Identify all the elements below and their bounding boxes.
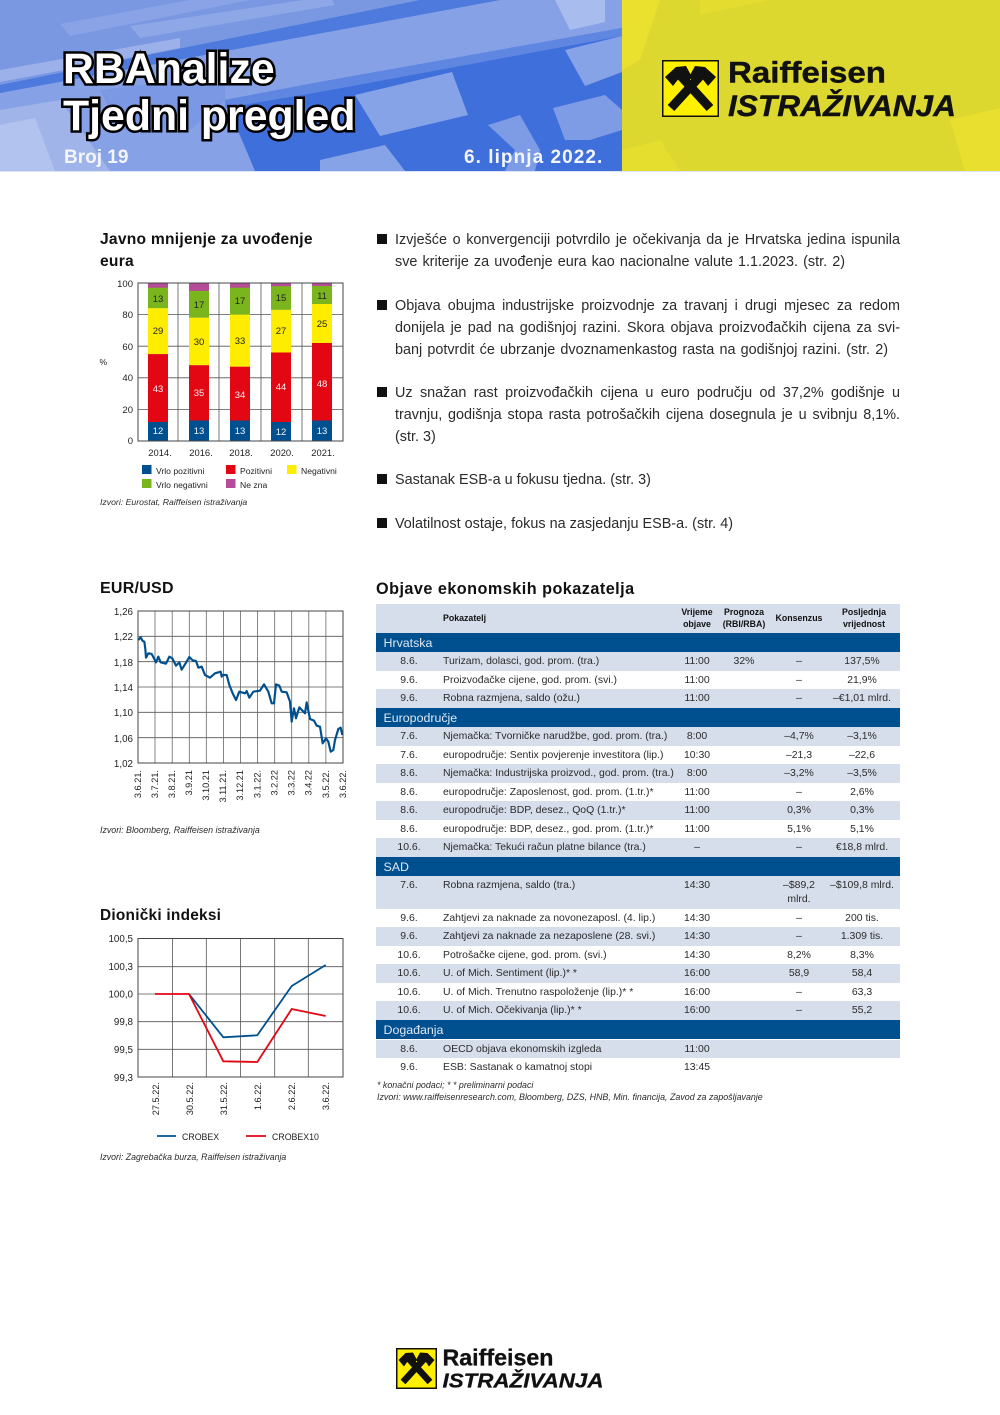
issue number: Broj 19 bbox=[64, 147, 128, 168]
row group: Europodručje: – bbox=[694, 842, 700, 853]
stacked bar chart: public opinion: 40 bbox=[122, 373, 133, 384]
row group: SAD: 14:30 bbox=[684, 880, 710, 891]
row group: SAD: – bbox=[796, 912, 802, 924]
row group: SAD: Zahtjevi za naknade za nezaposlene (28. svi.) bbox=[443, 931, 655, 942]
logo: Raiffeisen Istraživanja: Raiffeisen bbox=[728, 56, 886, 90]
row group: Europodručje: Njemačka: Tvorničke narudžbe, god. prom. (tra.) bbox=[443, 731, 667, 742]
stacked bar chart: public opinion: 13 bbox=[235, 426, 245, 437]
bullet 3: (str. 3) bbox=[395, 429, 436, 445]
stacked bar chart: public opinion: 13 bbox=[153, 294, 163, 305]
bullet 1: Izvješće o konvergenciji potvrdilo je očekivanja da je Hrvatska jedina ispunila bbox=[395, 232, 900, 248]
table header: Konsenzus bbox=[776, 613, 822, 623]
line chart: stock indices: CROBEX bbox=[182, 1132, 219, 1142]
line chart: EUR/USD: 1,18 bbox=[114, 658, 134, 669]
logo: Raiffeisen Istraživanja: ISTRAŽIVANJA bbox=[728, 89, 956, 123]
row group: SAD: 16:00 bbox=[684, 986, 710, 998]
stacked bar chart: public opinion: 0 bbox=[128, 436, 133, 447]
section: Hrvatska bbox=[376, 633, 900, 652]
line chart: stock indices: 99,3 bbox=[114, 1073, 134, 1084]
stacked bar chart: public opinion: 12 bbox=[153, 426, 163, 437]
table header: Vrijeme bbox=[681, 607, 713, 617]
table footnote and sources: Izvori: www.raiffeisenresearch.com, Bloomberg, DZS, HNB, Min. financija, Zavod za zapošljavanje bbox=[377, 1092, 763, 1102]
table header: Posljednja bbox=[842, 607, 886, 617]
row group: Hrvatska: 137,5% bbox=[844, 656, 880, 667]
row group: Događanja: 9.6. bbox=[400, 1062, 418, 1073]
section: SAD bbox=[376, 856, 900, 876]
row group: Europodručje: 11:00 bbox=[684, 786, 710, 798]
stacked bar chart: public opinion: 27 bbox=[276, 326, 286, 337]
row group: Hrvatska: 21,9% bbox=[847, 674, 877, 686]
row group: SAD: mlrd. bbox=[787, 894, 811, 905]
stacked bar chart: public opinion: Pozitivni bbox=[240, 466, 272, 476]
row group: Europodručje: –3,2% bbox=[784, 768, 814, 779]
table: economic indicator releases bbox=[376, 604, 900, 1073]
stacked bar chart: public opinion: Ne zna bbox=[240, 480, 267, 490]
line chart: EUR/USD: 1,02 bbox=[114, 759, 133, 770]
row group: SAD: Potrošačke cijene, god. prom. (svi.) bbox=[443, 950, 607, 960]
row group: SAD bbox=[376, 876, 900, 1020]
stacked bar chart: public opinion: 11 bbox=[317, 291, 327, 302]
row group: Europodručje: 8.6. bbox=[400, 824, 418, 834]
stacked bar chart: public opinion: 25 bbox=[317, 319, 327, 330]
line chart: stock indices: 27.5.22. bbox=[151, 1082, 161, 1115]
row group: Europodručje: Njemačka: Industrijska proizvod., god. prom. (tra.) bbox=[443, 768, 674, 779]
row group: Europodručje: europodručje: BDP, desez., QoQ (1.tr.)* bbox=[443, 805, 626, 816]
bullet 3 bbox=[377, 385, 900, 445]
row group: Hrvatska: 9.6. bbox=[400, 674, 418, 686]
source note: stock indices: Izvori: Zagrebačka burza, Raiffeisen istraživanja bbox=[100, 1152, 286, 1162]
line chart: EUR/USD: 3.7.21. bbox=[150, 770, 160, 798]
stacked bar chart: public opinion: 60 bbox=[122, 342, 133, 353]
row group: Događanja: 8.6. bbox=[400, 1044, 418, 1054]
stacked bar chart: public opinion: 2014. bbox=[148, 447, 172, 458]
stacked bar chart: public opinion: 43 bbox=[153, 384, 163, 395]
table header: (RBI/RBA) bbox=[723, 619, 765, 629]
stacked bar chart: public opinion: 12 bbox=[276, 427, 286, 438]
stacked bar chart: public opinion: 2021. bbox=[311, 447, 335, 458]
row group: Hrvatska: 9.6. bbox=[400, 693, 418, 704]
row group: SAD: 14:30 bbox=[684, 912, 710, 924]
row group: Europodručje: 10:30 bbox=[684, 750, 710, 760]
row group: Europodručje: 7.6. bbox=[400, 750, 418, 760]
row group: Hrvatska: – bbox=[796, 674, 802, 686]
row group: SAD: 10.6. bbox=[397, 950, 421, 960]
row group: Europodručje: 5,1% bbox=[787, 824, 811, 834]
section: SAD: SAD bbox=[384, 860, 409, 874]
line chart: EUR/USD bbox=[114, 607, 348, 803]
stacked bar chart: public opinion: 13 bbox=[317, 426, 327, 437]
issue date: 6. lipnja 2022. bbox=[464, 147, 603, 168]
line chart: EUR/USD: 3.2.22 bbox=[270, 770, 280, 796]
row group: Europodručje: 10.6. bbox=[397, 842, 421, 853]
row group: SAD: U. of Mich. Sentiment (lip.)* * bbox=[443, 968, 577, 979]
row group: Događanja: 11:00 bbox=[684, 1044, 710, 1054]
row group: Hrvatska: – bbox=[796, 693, 802, 704]
header banner bbox=[0, 0, 1000, 172]
header background: blue and yellow photo panels bbox=[0, 0, 1000, 172]
row group: Europodručje: europodručje: Zaposlenost, god. prom. (1.tr.)* bbox=[443, 786, 654, 798]
row group: Europodručje: 0,3% bbox=[850, 805, 874, 816]
bullet list: key messages bbox=[377, 232, 900, 532]
row group: SAD: –$109,8 mlrd. bbox=[830, 880, 894, 891]
line chart: EUR/USD: 3.6.22. bbox=[338, 770, 348, 798]
stacked bar chart: public opinion: 29 bbox=[153, 326, 163, 337]
row group: Europodručje: 8:00 bbox=[687, 731, 707, 742]
stacked bar chart: public opinion: 48 bbox=[317, 379, 327, 390]
row group: SAD: 58,4 bbox=[852, 968, 872, 979]
row group: SAD: 7.6. bbox=[400, 880, 418, 891]
row group: Europodručje: 8:00 bbox=[687, 768, 707, 779]
line chart: stock indices: 100,0 bbox=[108, 990, 134, 1000]
line chart: stock indices: 100,3 bbox=[108, 962, 134, 973]
bullet 3: travnju, godišnja stopa rasta potrošačkih cijena dosegnula je u svibnju 8,1%. bbox=[395, 407, 900, 423]
section: Europodručje bbox=[376, 708, 900, 727]
line chart: EUR/USD: 1,10 bbox=[114, 708, 134, 719]
row group: Hrvatska bbox=[376, 652, 900, 708]
line chart: EUR/USD: 3.4.22 bbox=[304, 770, 314, 796]
bullet 1: sve kriterije za uvođenje eura kao nacionalne valute 1.1.2023. (str. 2) bbox=[395, 254, 845, 270]
line chart: stock indices: 99,5 bbox=[114, 1045, 134, 1056]
row group: Europodručje: –21,3 bbox=[786, 750, 812, 760]
table header: objave bbox=[683, 619, 711, 629]
section: Događanja bbox=[376, 1020, 900, 1039]
table header: Prognoza bbox=[724, 607, 764, 617]
stacked bar chart: public opinion: 17 bbox=[235, 296, 245, 307]
row group: Hrvatska: 11:00 bbox=[684, 674, 710, 686]
row group: SAD: U. of Mich. Trenutno raspoloženje (lip.)* * bbox=[443, 986, 633, 998]
row group: Hrvatska: –€1,01 mlrd. bbox=[833, 693, 891, 704]
line chart: EUR/USD: 3.5.22. bbox=[321, 770, 331, 798]
table footnote and sources bbox=[377, 1080, 763, 1102]
row group: Europodručje: 0,3% bbox=[787, 805, 811, 816]
table header: Pokazatelj bbox=[443, 613, 486, 623]
row group: Europodručje: – bbox=[796, 786, 802, 798]
row group: SAD: 10.6. bbox=[397, 968, 421, 979]
title line 2: Tjedni pregled bbox=[63, 92, 355, 140]
row group: Europodručje: 11:00 bbox=[684, 824, 710, 834]
table header: vrijednost bbox=[843, 619, 885, 629]
line chart: EUR/USD: 1,14 bbox=[114, 683, 134, 694]
row group: SAD: 10.6. bbox=[397, 986, 421, 998]
line chart: EUR/USD: 3.1.22. bbox=[252, 770, 262, 798]
bullet 5: Volatilnost ostaje, fokus na zasjedanju ESB-a. (str. 4) bbox=[395, 516, 733, 532]
line chart: EUR/USD: 3.10.21 bbox=[201, 770, 211, 801]
heading: public opinion on euro: Javno mnijenje za uvođenje eura bbox=[100, 231, 313, 270]
table header bbox=[376, 604, 900, 633]
row group: Europodručje: €18,8 mlrd. bbox=[836, 842, 888, 853]
row group: SAD: 8,2% bbox=[787, 950, 811, 960]
line chart: EUR/USD: 3.8.21. bbox=[167, 770, 177, 798]
row group: SAD: 14:30 bbox=[684, 950, 710, 960]
row group: SAD: 16:00 bbox=[684, 968, 710, 979]
stacked bar chart: public opinion: Negativni bbox=[301, 466, 337, 476]
stacked bar chart: public opinion: 33 bbox=[235, 336, 245, 347]
stacked bar chart: public opinion: 13 bbox=[194, 426, 204, 437]
section: Europodručje: Europodručje bbox=[384, 710, 457, 724]
row group: Događanja: 13:45 bbox=[684, 1062, 710, 1073]
row group: SAD: – bbox=[796, 1005, 802, 1016]
stacked bar chart: public opinion: 30 bbox=[194, 337, 204, 348]
row group: SAD: 14:30 bbox=[684, 931, 710, 942]
row group: Europodručje: –22,6 bbox=[849, 750, 875, 760]
row group: Europodručje: europodručje: Sentix povjerenje investitora (lip.) bbox=[443, 750, 663, 760]
row group: Europodručje: 7.6. bbox=[400, 731, 418, 742]
line chart: stock indices: 99,8 bbox=[114, 1017, 134, 1028]
line chart: EUR/USD: 3.9.21 bbox=[184, 770, 194, 796]
stacked bar chart: public opinion: 2016. bbox=[189, 447, 213, 458]
row group: SAD: – bbox=[796, 931, 802, 942]
line chart: EUR/USD: 3.3.22 bbox=[286, 770, 296, 796]
row group: Hrvatska: 11:00 bbox=[684, 656, 710, 667]
stacked bar chart: public opinion: 35 bbox=[194, 388, 204, 399]
line chart: EUR/USD: 1,22 bbox=[114, 632, 133, 643]
row group: Europodručje: 8.6. bbox=[400, 805, 418, 816]
logo: Raiffeisen Istraživanja bbox=[662, 56, 956, 123]
row group: Europodručje: –3,1% bbox=[847, 731, 877, 742]
line chart: EUR/USD: 3.12.21 bbox=[235, 770, 245, 801]
line chart: EUR/USD: 3.11.21. bbox=[218, 770, 228, 803]
row group: SAD: 63,3 bbox=[852, 986, 872, 998]
bullet 2 bbox=[377, 298, 900, 358]
row group: SAD: 16:00 bbox=[684, 1005, 710, 1016]
source note: EUR/USD: Izvori: Bloomberg, Raiffeisen istraživanja bbox=[100, 825, 260, 835]
row group: SAD: 10.6. bbox=[397, 1005, 421, 1016]
bullet 2: donijela je pad na godišnjoj razini. Skora objava proizvođačkih cijena za svi- bbox=[395, 320, 900, 336]
row group: Europodručje: 5,1% bbox=[850, 824, 874, 834]
heading: stock indices: Dionički indeksi bbox=[100, 907, 221, 924]
row group: Europodručje: 8.6. bbox=[400, 786, 418, 798]
line chart: stock indices: 1.6.22. bbox=[253, 1082, 263, 1110]
row group: Hrvatska: Proizvođačke cijene, god. prom. (svi.) bbox=[443, 674, 617, 686]
line chart: stock indices bbox=[108, 934, 344, 1142]
stacked bar chart: public opinion: 34 bbox=[235, 390, 245, 401]
row group: Hrvatska: Robna razmjena, saldo (ožu.) bbox=[443, 693, 580, 704]
row group: Događanja: OECD objava ekonomskih izgleda bbox=[443, 1044, 601, 1054]
row group: SAD: 1.309 tis. bbox=[841, 931, 883, 942]
line chart: stock indices: 3.6.22. bbox=[321, 1082, 331, 1110]
stacked bar chart: public opinion: % bbox=[100, 357, 108, 367]
row group: Europodručje bbox=[376, 727, 900, 857]
row group: SAD: 8,3% bbox=[850, 950, 874, 960]
stacked bar chart: public opinion bbox=[100, 279, 344, 490]
row group: Europodručje: 11:00 bbox=[684, 805, 710, 816]
row group: SAD: 58,9 bbox=[789, 968, 809, 979]
title line 1: RBAnalize bbox=[63, 45, 275, 93]
line chart: EUR/USD: 1,06 bbox=[114, 734, 134, 745]
stacked bar chart: public opinion: 15 bbox=[276, 293, 286, 304]
bullet 1 bbox=[377, 232, 900, 270]
stacked bar chart: public opinion: 100 bbox=[117, 279, 133, 290]
footer logo: Raiffeisen Istraživanja: ISTRAŽIVANJA bbox=[442, 1369, 604, 1393]
bullet 3: Uz snažan rast proizvođačkih cijena u euro području od 37,2% godišnje u bbox=[395, 385, 900, 401]
row group: Europodručje: – bbox=[796, 842, 802, 853]
row group: Europodručje: –3,5% bbox=[847, 768, 877, 779]
row group: Hrvatska: 11:00 bbox=[684, 693, 710, 704]
line chart: stock indices: 2.6.22. bbox=[287, 1082, 297, 1110]
source note: opinion chart: Izvori: Eurostat, Raiffeisen istraživanja bbox=[100, 497, 247, 507]
footer logo: Raiffeisen Istraživanja: Raiffeisen bbox=[442, 1344, 554, 1370]
section: Događanja: Događanja bbox=[384, 1022, 443, 1036]
stacked bar chart: public opinion: Vrlo negativni bbox=[156, 480, 208, 490]
bullet 4: Sastanak ESB-a u fokusu tjedna. (str. 3) bbox=[395, 472, 651, 488]
row group: SAD: 55,2 bbox=[852, 1005, 872, 1016]
row group: SAD: U. of Mich. Očekivanja (lip.)* * bbox=[443, 1005, 582, 1016]
line chart: stock indices: 100,5 bbox=[108, 934, 134, 945]
row group: Europodručje: europodručje: BDP, desez., god. prom. (1.tr.)* bbox=[443, 824, 653, 834]
line chart: stock indices: CROBEX10 bbox=[272, 1132, 319, 1142]
line chart: stock indices: 30.5.22. bbox=[185, 1082, 195, 1115]
row group: Hrvatska: Turizam, dolasci, god. prom. (tra.) bbox=[443, 656, 599, 667]
row group: SAD: 9.6. bbox=[400, 912, 418, 924]
bullet 2: Objava obujma industrijske proizvodnje za travanj i drugi mjesec za redom bbox=[395, 298, 900, 314]
stacked bar chart: public opinion: 80 bbox=[122, 310, 133, 321]
row group: SAD: 200 tis. bbox=[845, 912, 879, 924]
stacked bar chart: public opinion: 2020. bbox=[270, 447, 294, 458]
row group: SAD: –$89,2 bbox=[783, 880, 815, 891]
heading: economic indicator releases: Objave ekonomskih pokazatelja bbox=[376, 580, 635, 598]
stacked bar chart: public opinion: 17 bbox=[194, 300, 204, 311]
row group: Događanja: ESB: Sastanak o kamatnoj stopi bbox=[443, 1062, 592, 1073]
row group: SAD: 9.6. bbox=[400, 931, 418, 942]
row group: SAD: Zahtjevi za naknade za novonezaposl. (4. lip.) bbox=[443, 912, 655, 924]
bullet 2: banj potvrdit će ubrzanje dvoznamenkastog rasta na godišnjoj razini. (str. 2) bbox=[395, 342, 888, 358]
stacked bar chart: public opinion: 20 bbox=[122, 405, 133, 416]
row group: Hrvatska: – bbox=[796, 656, 802, 667]
stacked bar chart: public opinion: 2018. bbox=[229, 447, 253, 458]
row group: Europodručje: Njemačka: Tekući račun platne bilance (tra.) bbox=[443, 842, 646, 853]
table footnote and sources: * konačni podaci; * * preliminarni podaci bbox=[377, 1080, 533, 1090]
row group: Europodručje: –4,7% bbox=[784, 731, 814, 742]
row group: SAD: Robna razmjena, saldo (tra.) bbox=[443, 880, 575, 891]
heading: EUR/USD: EUR/USD bbox=[100, 580, 174, 597]
row group: Hrvatska: 8.6. bbox=[400, 656, 418, 667]
section: Hrvatska: Hrvatska bbox=[384, 636, 432, 650]
stacked bar chart: public opinion: 44 bbox=[276, 382, 286, 393]
row group: Europodručje: 8.6. bbox=[400, 768, 418, 779]
row group: Europodručje: 2,6% bbox=[850, 786, 874, 798]
line chart: stock indices: 31.5.22. bbox=[219, 1082, 229, 1115]
row group: Događanja bbox=[376, 1040, 900, 1073]
row group: Hrvatska: 32% bbox=[734, 656, 754, 667]
stacked bar chart: public opinion: Vrlo pozitivni bbox=[156, 466, 204, 476]
line chart: EUR/USD: 1,26 bbox=[114, 607, 134, 618]
footer logo: Raiffeisen Istraživanja bbox=[396, 1344, 604, 1393]
row group: SAD: – bbox=[796, 986, 802, 998]
line chart: EUR/USD: 3.6.21. bbox=[133, 770, 143, 798]
